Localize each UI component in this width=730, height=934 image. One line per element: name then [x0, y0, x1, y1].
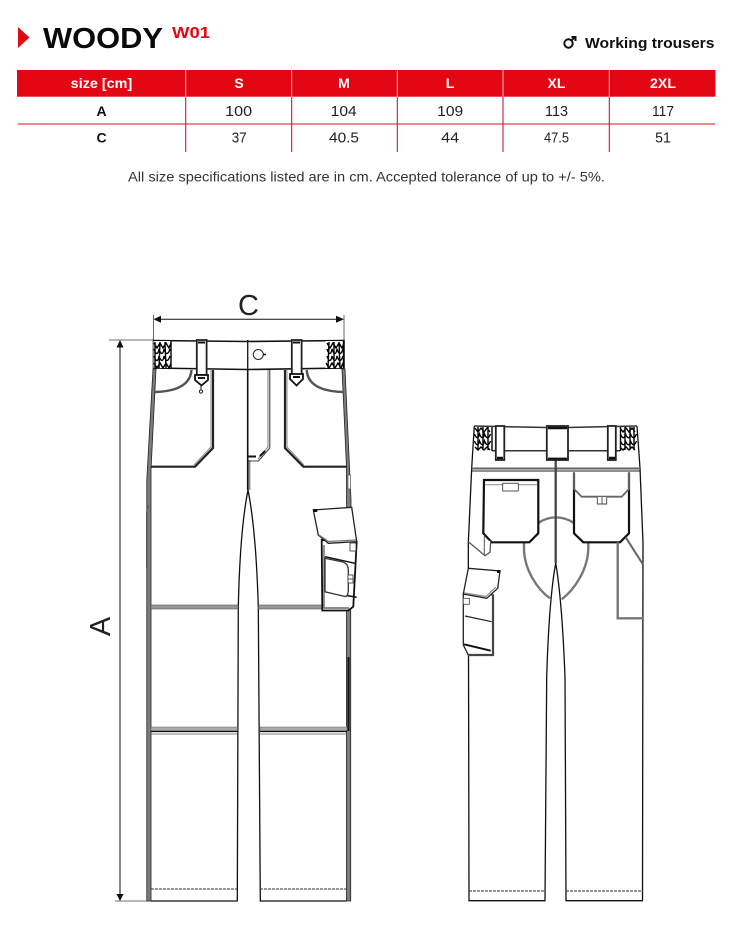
right belt loop and D-ring	[290, 340, 303, 386]
back seat patch	[524, 517, 588, 599]
table row A: 113	[545, 104, 568, 120]
back waistband	[474, 426, 637, 460]
size table	[17, 70, 716, 152]
back elastic left	[474, 427, 492, 451]
front left pocket	[151, 370, 213, 467]
table row A: A	[96, 103, 107, 119]
header arrow icon	[18, 27, 30, 48]
back right pocket	[574, 472, 629, 542]
fly	[248, 340, 270, 490]
table header row: size [cm]	[71, 75, 132, 91]
back left hip panel	[468, 535, 491, 556]
table row C: C	[96, 129, 107, 145]
front view trousers	[146, 340, 357, 901]
title: WOODY: WOODY	[43, 23, 163, 55]
table row C: 37	[232, 130, 247, 146]
back legs outline	[468, 426, 643, 901]
back yoke seam	[472, 468, 640, 471]
table row A: 104	[331, 104, 357, 120]
elastic left	[154, 341, 172, 368]
back centre loop	[547, 426, 568, 460]
table row C: 51	[655, 130, 671, 146]
icon: male symbol	[564, 37, 576, 48]
table header row: S	[234, 75, 244, 91]
table header row: XL	[548, 75, 566, 91]
front right pocket	[285, 370, 347, 467]
table header row: M	[338, 75, 350, 91]
table row A: 117	[652, 104, 674, 120]
product type label: Working trousers	[585, 36, 714, 52]
table header row: 2XL	[650, 75, 676, 91]
table header row: L	[446, 75, 455, 91]
left belt loop and D-ring	[195, 340, 208, 393]
back centre seam	[555, 460, 557, 563]
dimension C	[154, 290, 344, 340]
product code: W01: W01	[172, 25, 210, 42]
knee seams	[151, 605, 348, 734]
front cargo pocket	[313, 507, 357, 610]
table header row	[17, 70, 716, 97]
dimension C: C	[238, 290, 259, 322]
table row A	[96, 103, 674, 120]
dimension A	[85, 340, 153, 901]
back right thigh panel	[618, 537, 643, 618]
dimension A: A	[85, 616, 117, 636]
tolerance note: All size specifications listed are in cm. Accepted tolerance of up to +/- 5%.	[128, 170, 605, 184]
back elastic right	[620, 427, 636, 451]
back belt loops	[496, 426, 616, 460]
front legs outline	[147, 369, 351, 901]
back cargo pocket	[463, 568, 500, 655]
back view trousers	[463, 426, 643, 901]
table row A: 109	[437, 104, 463, 120]
table row C: 40.5	[329, 130, 359, 146]
waistband	[154, 340, 344, 370]
back left pocket	[483, 480, 538, 542]
icon: waist button	[253, 350, 266, 360]
side tabs	[146, 475, 350, 568]
table row C: 44	[441, 130, 459, 146]
table row C	[96, 129, 671, 146]
table row C: 47.5	[544, 130, 569, 146]
table row A: 100	[225, 104, 252, 120]
elastic right	[326, 341, 344, 368]
